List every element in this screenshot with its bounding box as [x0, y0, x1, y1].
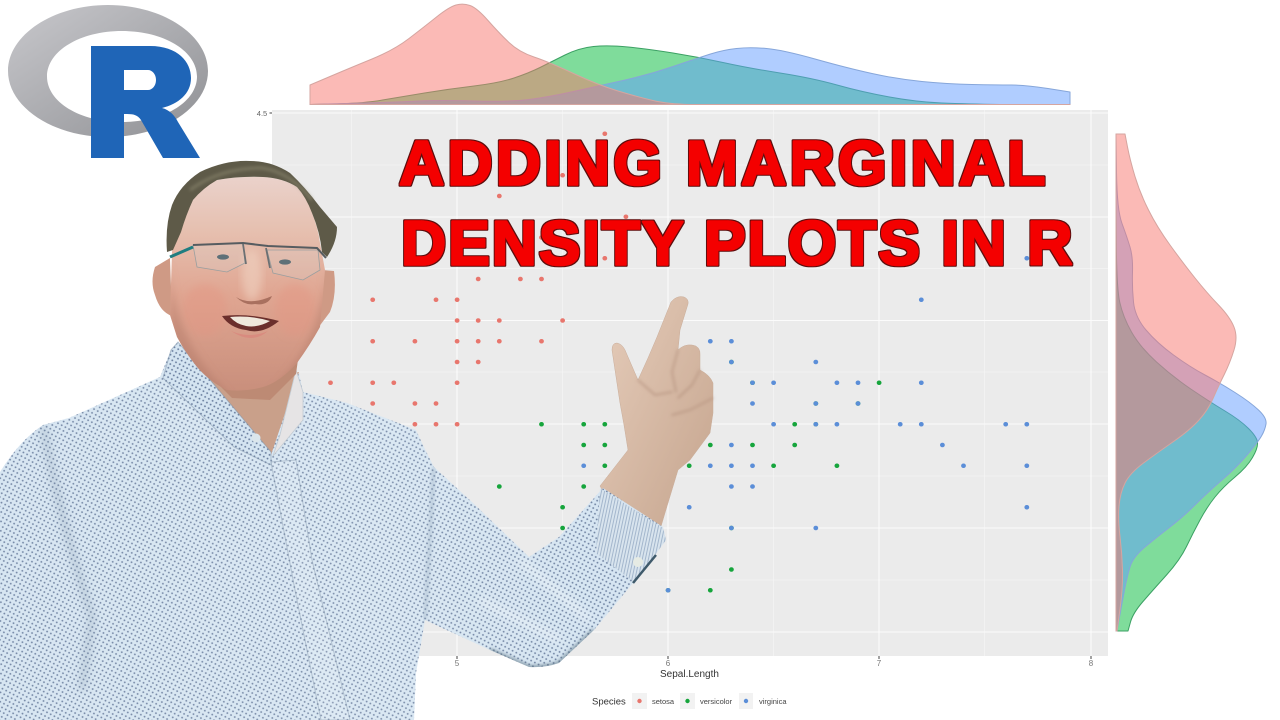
- ears: [152, 258, 335, 328]
- x axis title: Sepal.Length: [660, 669, 719, 680]
- title line 1: ADDING MARGINAL: [399, 130, 1045, 199]
- collar button: [252, 434, 260, 442]
- density: versicolor: [1116, 193, 1258, 631]
- x axis ticks: 8: [1089, 659, 1094, 668]
- shirt shading: [0, 358, 598, 720]
- legend key: versicolor: [680, 693, 733, 709]
- legend key: setosa: [632, 693, 675, 709]
- cuff button: [633, 557, 643, 567]
- x axis ticks: 5: [455, 659, 460, 668]
- top marginal density plot: [310, 4, 1070, 104]
- mouth: [222, 315, 279, 338]
- y axis tick 4.5: [257, 109, 272, 118]
- neck: [176, 330, 300, 400]
- legend key: versicolor: versicolor: [700, 697, 733, 706]
- density: virginica: [310, 48, 1070, 104]
- glasses lenses: [193, 243, 320, 280]
- title line 2: DENSITY PLOTS IN R: [401, 210, 1072, 279]
- hair highlight: [190, 168, 312, 200]
- presenter: [0, 161, 713, 720]
- x axis ticks: 6: [666, 659, 671, 668]
- hair: [167, 161, 337, 257]
- collar right: [273, 370, 303, 456]
- x axis ticks: [455, 656, 1094, 668]
- density: virginica: [1116, 134, 1266, 631]
- legend key: setosa: setosa: [652, 697, 675, 706]
- R logo: [8, 5, 208, 158]
- x axis ticks: 7: [877, 659, 882, 668]
- glasses: [170, 243, 326, 280]
- legend: [592, 693, 787, 709]
- title: [399, 130, 1072, 279]
- logo grey ring: [8, 5, 208, 137]
- eyes: [217, 254, 291, 265]
- legend key: virginica: [739, 693, 787, 709]
- glasses top frame: [193, 243, 326, 258]
- face shading: [170, 251, 322, 384]
- finger creases: [638, 350, 713, 415]
- right marginal density plot: [1116, 134, 1266, 631]
- inner neck: [186, 352, 299, 455]
- glasses bridge: [243, 244, 270, 268]
- legend key: virginica: virginica: [759, 697, 787, 706]
- density: versicolor: [310, 46, 1070, 104]
- y axis tick 4.5: 4.5: [257, 109, 267, 118]
- density: setosa: [1116, 134, 1236, 631]
- glasses teal arm: [170, 247, 193, 257]
- shirt: [0, 340, 680, 720]
- logo blue letter R: [91, 46, 200, 158]
- scatter plot panel: [257, 109, 1108, 680]
- shirt body and sleeve: [0, 342, 666, 720]
- density: setosa: [310, 4, 1070, 104]
- legend title: Species: [592, 696, 626, 708]
- nose shadow: [236, 296, 272, 304]
- virginica points: [436, 258, 1027, 590]
- shirt placket: [271, 460, 350, 720]
- collar left: [163, 342, 271, 465]
- setosa points: [309, 134, 626, 569]
- versicolor points: [436, 341, 879, 632]
- face: [170, 177, 325, 391]
- shirt cuff: [596, 488, 666, 583]
- forearm and hand pointing up: [600, 297, 713, 540]
- cuff shadow edge: [633, 555, 656, 583]
- plot background: [272, 110, 1108, 656]
